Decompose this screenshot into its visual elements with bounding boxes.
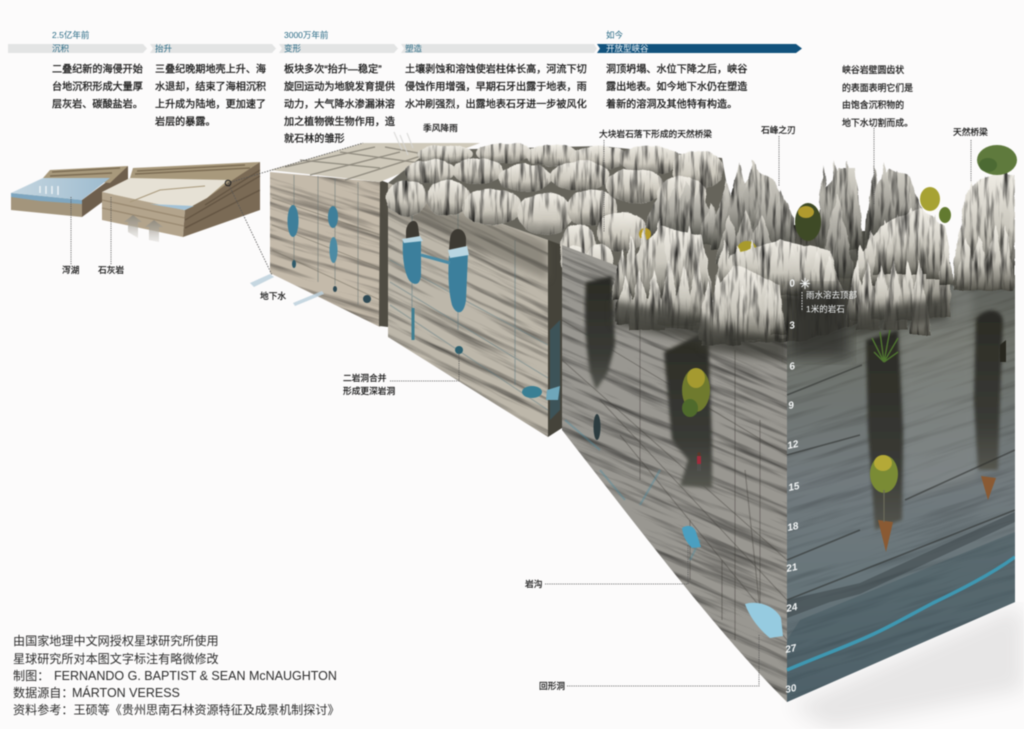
depth scale: 30 [784,683,798,696]
text block: shaping: 土壤剥蚀和溶蚀使岩柱体长高，河流下切 [405,62,587,76]
blue pool upper [682,526,701,548]
text block: deformation: 就石林的雏形 [284,132,345,145]
text block: canyon wall note: 地下水切割而成。 [842,117,913,128]
rock block C: front-left face [561,244,788,702]
plant: yellow shrub in gap [682,368,710,417]
labels: 季风降雨 [423,122,458,133]
text block: canyon wall note: 峡谷岩壁圆齿状 [842,64,904,75]
text block: deposition: 二叠纪新的海侵开始 [52,62,143,76]
text block: uplift: 水退却，结束了海相沉积 [155,80,266,93]
tree on natural bridge [977,145,1017,175]
labels [62,122,988,691]
timeline bar: 2.5亿年前 [52,30,90,40]
labels: 泻湖 [62,265,80,275]
text block: open canyon: 洞顶坍塌、水位下降之后，峡谷 [606,62,747,76]
labels: 二岩洞合并 [343,372,387,383]
dark mass under rock tops [388,146,735,300]
labels: 地下水 [260,290,286,301]
plant: tree in funnel [870,455,898,522]
plants [682,145,1017,522]
light drip on pillar [900,285,978,500]
text block: uplift [155,62,266,128]
credits: MÁRTON VERESS [72,685,180,700]
dark bases where spires meet cliff faces [613,296,948,362]
text block: deformation [284,62,395,145]
timeline bar: 变形 [284,44,302,54]
cover right edge of pillar [1015,140,1024,602]
shrubs on summit [639,187,951,259]
corner dark drips [788,288,850,358]
timeline bar: 3000万年前 [284,30,329,40]
text block: deposition: 台地沉积形成大量厚 [52,80,143,93]
text block: deposition: 层灰岩、碳酸盐岩。 [52,98,143,110]
text block: deformation: 板块多次“抬升—稳定” [284,62,382,76]
blue pool lower [745,603,783,638]
timeline bar: 开放型峡谷 [606,44,649,54]
credits: 资料参考：王硕等《贵州思南石林资源特征及成景机制探讨》 [13,702,340,717]
groundwater arrows [250,274,324,306]
depth scale: 18 [786,521,800,534]
credits: 制图： [13,669,49,683]
depth scale: 9 [787,400,795,412]
underground stream [787,557,1015,670]
labels: 回形洞 [539,681,565,691]
labels: 石峰之刃 [761,124,796,135]
rain streaks [394,132,413,155]
rock block B: front face [387,182,563,438]
text block: deposition [52,62,143,110]
labels: 天然桥梁 [953,126,988,137]
timeline bar: 沉积 [52,44,70,54]
dark slot: small pillar [585,276,615,390]
timeline bar: 塑造 [405,44,423,54]
diagram: uplifted limestone block [102,162,260,242]
drips below block B rim [388,188,548,280]
text block: canyon wall note [842,64,913,128]
rock tops: rounded back lobes [386,143,723,286]
callout: rain dissolves one metre: 雨水溶去顶部 [806,290,858,300]
rock right face [786,262,1016,702]
text block: open canyon: 露出地表。如今地下水仍在塑造 [606,80,747,93]
soft ground shadows [790,606,1024,729]
depth scale [783,278,801,696]
depth scale: 12 [786,439,800,452]
credits: FERNANDO G. BAPTIST & SEAN McNAUGHTON [54,669,337,683]
depth scale: 24 [784,602,799,615]
text block: canyon wall note: 由饱含沉积物的 [842,99,904,110]
depth scale: 0 [788,278,796,290]
timeline bar: 抬升 [155,44,173,54]
dark slot: gap beside plant [664,330,712,488]
text block: open canyon: 着新的溶洞及其他特有构造。 [606,98,737,110]
rock block A: front face [269,142,480,328]
labels: 岩沟 [525,578,542,589]
leader lines [71,128,971,686]
credits: 由国家地理中文网授权星球研究所使用 [13,633,219,648]
depth scale: 15 [787,481,801,494]
plant: palm on ledge [872,330,898,362]
text block: uplift: 岩层的暴露。 [155,115,216,128]
front spire clusters [612,165,1015,345]
depth scale: 27 [783,643,798,656]
funnel sinks [878,476,996,552]
caves in block B [402,221,560,400]
text block: shaping [405,62,587,110]
depth scale: 6 [788,361,796,373]
text block: deformation: 旋回运动为地貌发育提供 [284,80,395,93]
text block: deformation: 加之植物微生物作用，造 [284,115,395,128]
depth scale: 3 [788,320,796,332]
credits [13,633,340,717]
text block: uplift: 三叠纪晚期地壳上升、海 [155,62,266,76]
credits: 星球研究所对本图文字标注有略微修改 [13,651,219,666]
callout: rain dissolves one metre: 1米的岩石 [806,304,845,314]
callout: rain dissolves one metre [800,278,858,314]
labels: 大块岩石落下形成的天然桥梁 [599,128,712,139]
text block: shaping: 侵蚀作用增强，早期石牙出露于地表，雨 [405,80,587,93]
labels: 形成更深岩洞 [343,385,395,396]
credits: 数据源自： [13,685,73,700]
text block: open canyon [606,62,747,110]
timeline bar [8,30,802,54]
depth scale: 21 [784,562,799,575]
timeline bar: 如今 [606,30,624,40]
dark slots in right face [866,330,903,530]
diagram: lagoon block [11,166,128,217]
text block: canyon wall note: 的表面表明它们是 [842,82,913,93]
caves in block A [288,205,371,303]
person [697,452,701,471]
text block: deformation: 动力，大气降水渗漏淋溶 [284,98,395,110]
text block: uplift: 上升成为陆地，更加速了 [155,98,266,110]
labels: 石灰岩 [98,264,124,275]
text block: shaping: 水冲刷强烈，出露地表石牙进一步被风化 [405,98,587,110]
back spire clusters [644,160,930,342]
